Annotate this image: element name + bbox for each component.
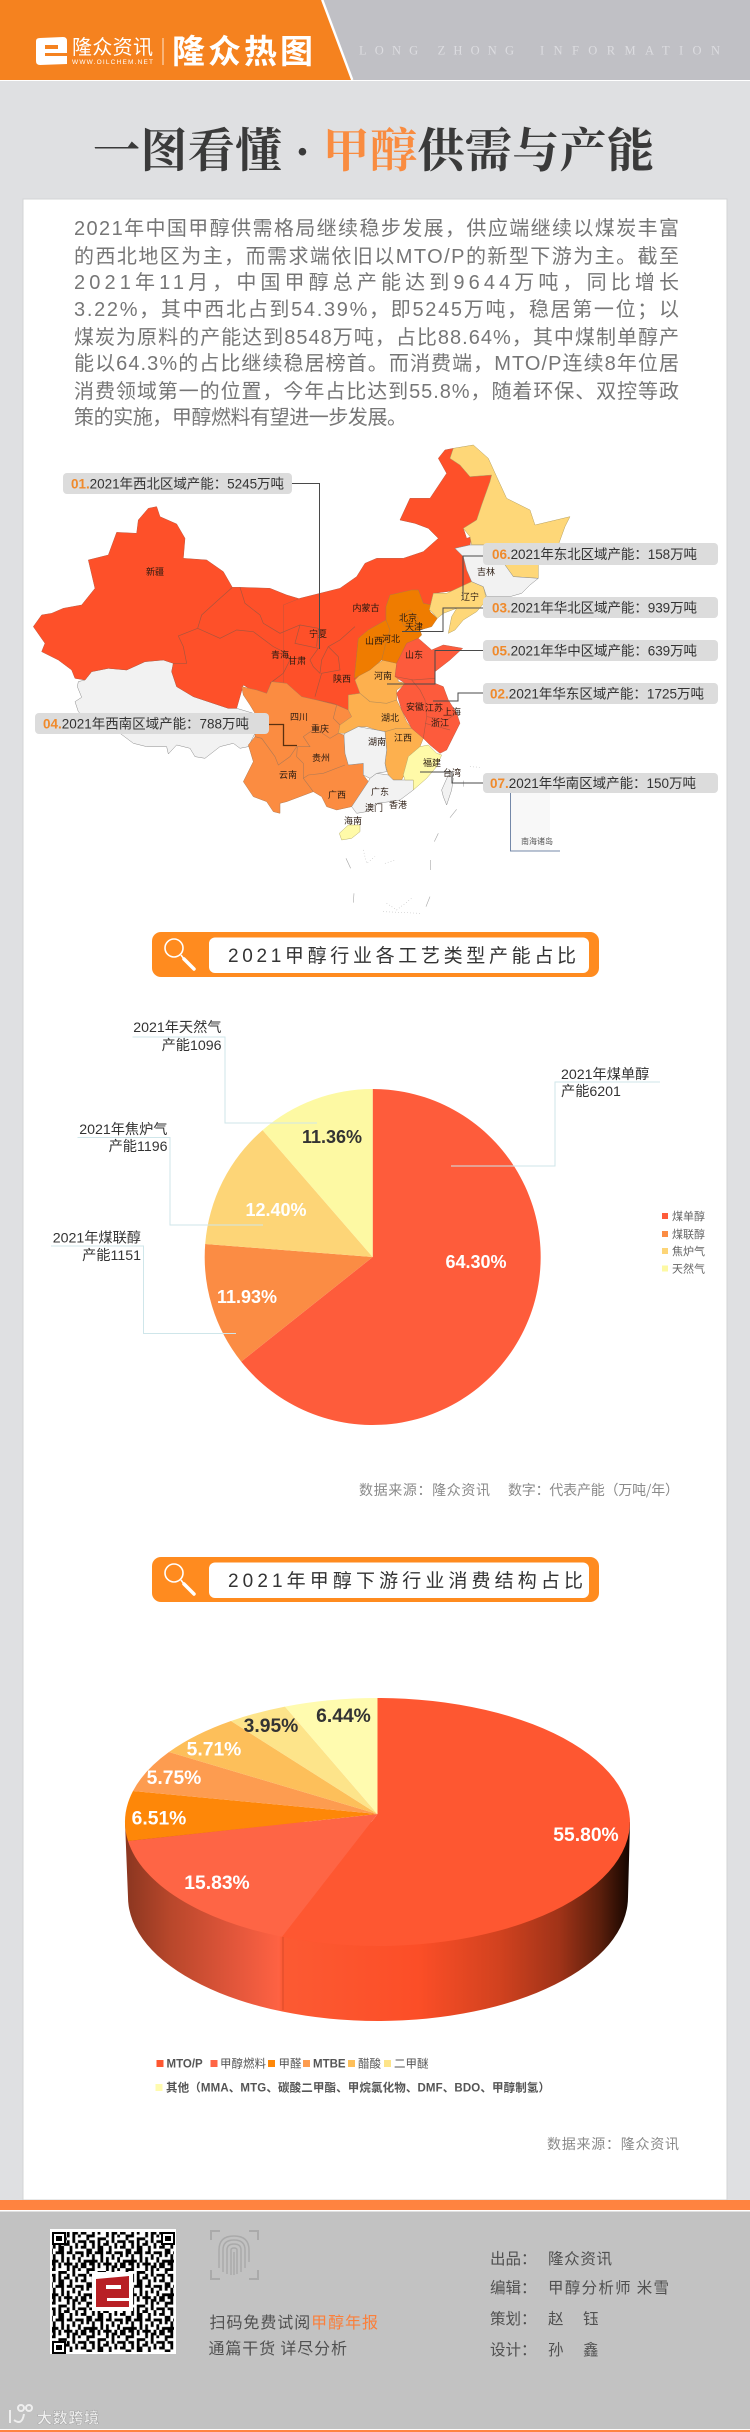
3D pie legend: MTBE — [313, 2058, 346, 2070]
map: province names: 安徽 — [406, 700, 424, 713]
map: province names: 香港 — [389, 798, 407, 811]
source note: downstream chart: 数据来源：隆众资讯 — [547, 2134, 679, 2154]
pie side wall — [125, 1822, 630, 2021]
credits: 策划： — [490, 2307, 537, 2329]
map of China — [33, 445, 718, 913]
slice: others — [285, 1698, 378, 1814]
heading: process type capacity share — [152, 932, 599, 977]
intro text block: 能以64.3%的占比继续稳居榜首。而消费端，MTO/P连续8年位居 — [74, 352, 679, 375]
source note: process chart — [359, 1480, 679, 1500]
map region: northwest, red — [33, 448, 492, 713]
map: south sea islands — [346, 767, 480, 913]
credits — [490, 2247, 669, 2360]
pie value labels — [217, 1127, 507, 1307]
intro text block: 消费领域第一的位置，今年占比达到55.8%，随着环保、双控等政 — [74, 380, 679, 403]
map: province names: 辽宁 — [461, 590, 479, 603]
pie chart: process types — [51, 1019, 705, 1425]
map region: Fujian and Hainan, pale yellow — [339, 745, 442, 840]
slice: MTBE — [133, 1752, 378, 1814]
map: province names: 吉林 — [477, 565, 495, 578]
slice: acetic acid — [169, 1721, 378, 1814]
company website: WWW.OILCHEM.NET — [72, 59, 153, 66]
slice: coal to methanol — [241, 1089, 541, 1425]
map: province names: 台湾 — [443, 766, 461, 779]
credits: 出品： — [490, 2247, 537, 2269]
pie leader lines — [51, 1037, 660, 1334]
3D pie legend: 二甲醚 — [394, 2056, 429, 2070]
slice: formaldehyde — [125, 1791, 378, 1841]
heading: process type capacity share: 2021甲醇行业各工艺类型产能占比 — [228, 945, 576, 967]
callout: northeast capacity — [483, 543, 718, 565]
map: province names: 上海 — [443, 705, 461, 718]
pie value labels: 64.30% — [445, 1252, 507, 1272]
map: province names: 云南 — [279, 768, 297, 781]
slice: methanol fuel — [128, 1814, 378, 1937]
pie callout labels: 2021年煤单醇 — [561, 1066, 649, 1083]
callout: central china capacity: 05.2021年华中区域产能：639万吨 — [492, 644, 697, 658]
map: province names: 山西 — [365, 634, 383, 647]
map: province names: 海南 — [344, 814, 362, 827]
3D pie legend: 甲醇燃料 — [220, 2056, 266, 2070]
map: province names: 河南 — [374, 669, 392, 682]
callout: south china capacity: 07.2021年华南区域产能：150万吨 — [490, 776, 696, 791]
3D pie value labels — [132, 1706, 619, 1894]
3D pie legend: 醋酸 — [358, 2056, 381, 2070]
intro text block: 煤炭为原料的产能达到8548万吨，占比88.64%，其中煤制单醇产 — [74, 326, 679, 349]
heading: downstream consumption share: 2021年甲醇下游行业消费结构占比 — [228, 1570, 583, 1592]
callout: southwest capacity — [35, 713, 269, 734]
english tagline — [359, 44, 720, 58]
map region: Tibet and gray provinces west — [75, 660, 255, 758]
footer — [0, 2200, 750, 2432]
pie value labels: 11.93% — [217, 1287, 277, 1307]
credits: 编辑： — [490, 2276, 537, 2298]
intro text block: 2021年中国甲醇供需格局继续稳步发展，供应端继续以煤炭丰富 — [74, 217, 679, 240]
pie callout labels: 2021年煤联醇 — [53, 1230, 141, 1246]
pie value labels: 11.36% — [302, 1127, 362, 1147]
pie callout labels: 2021年焦炉气 — [79, 1122, 168, 1138]
watermark: 大数跨境 — [37, 2407, 99, 2428]
map: province names: 福建 — [423, 756, 441, 769]
QR caption: 扫码免费试阅甲醇年报 — [210, 2309, 378, 2333]
credits: 孙 — [548, 2338, 564, 2360]
map: province names: 广东 — [371, 785, 389, 798]
source note: process chart: 数字：代表产能（万吨/年） — [508, 1480, 679, 1500]
map borders: east provinces — [395, 677, 457, 738]
credits: 钰 — [583, 2307, 599, 2329]
map: province names: 江苏 — [425, 701, 443, 714]
callout: north china capacity — [483, 597, 718, 618]
3D pie legend: 甲醛 — [278, 2056, 302, 2070]
map: province names: 湖南 — [368, 735, 386, 748]
callout: east china capacity — [483, 683, 718, 704]
pie callout labels: 产能6201 — [561, 1084, 621, 1100]
pie callout labels: 2021年天然气 — [133, 1019, 222, 1036]
3D pie chart: downstream consumption — [125, 1698, 630, 2094]
map region: central, light orange — [338, 660, 423, 780]
callout: northeast capacity: 06.2021年东北区域产能：158万吨 — [492, 547, 697, 562]
heading: downstream consumption share — [152, 1557, 599, 1602]
3D pie value labels: 3.95% — [244, 1716, 298, 1737]
3D pie value labels: 55.80% — [553, 1825, 619, 1846]
callout: northwest capacity — [63, 473, 292, 494]
english tagline: INFORMATION — [540, 44, 720, 58]
english tagline: LONG ZHONG — [359, 44, 514, 58]
pie legend: 煤联醇 — [672, 1226, 705, 1242]
map: province names: 陕西 — [333, 672, 351, 685]
map: province names: 湖北 — [381, 711, 399, 724]
callout: northwest capacity: 01.2021年西北区域产能：5245万吨 — [71, 476, 284, 492]
icon: magnifier — [165, 1564, 194, 1594]
panel: main white card — [23, 199, 727, 2200]
3D pie legend — [156, 2056, 550, 2094]
pie legend — [662, 1208, 705, 1276]
callout: south china capacity — [483, 773, 718, 793]
pie legend: 煤单醇 — [672, 1208, 705, 1224]
map: province names: 宁夏 — [309, 627, 327, 640]
intro text block: 3.22%，其中西北占到54.39%，即5245万吨，稳居第一位；以 — [74, 298, 679, 321]
3D pie value labels: 5.71% — [187, 1740, 241, 1760]
credits: 鑫 — [583, 2338, 599, 2360]
credits: 隆众资讯 — [548, 2247, 612, 2269]
3D pie legend: 其他（MMA、MTG、碳酸二甲酯、甲烷氯化物、DMF、BDO、甲醇制氢） — [166, 2080, 550, 2094]
credits: 甲醇分析师 米雪 — [548, 2276, 669, 2298]
map: province names: 河北 — [382, 632, 400, 645]
map inset: south sea islands box — [510, 793, 560, 851]
map: province names: 北京 — [399, 611, 417, 624]
map: province names: 天津 — [405, 620, 423, 633]
callout: east china capacity: 02.2021年华东区域产能：1725万吨 — [490, 686, 704, 702]
map: province names — [146, 565, 495, 827]
map region: Hunan and Guangdong, gray — [344, 727, 453, 813]
slice: MTO/P — [282, 1698, 630, 1946]
3D pie value labels: 6.44% — [316, 1706, 371, 1727]
header band — [0, 0, 750, 81]
map inset: south sea islands box: 南海诸岛 — [521, 836, 553, 847]
map: province names: 重庆 — [311, 722, 329, 735]
company name: 隆众资讯 — [72, 31, 153, 60]
map leader lines — [269, 484, 483, 783]
QR caption — [208, 2309, 378, 2359]
map: province names: 四川 — [290, 710, 308, 723]
QR code — [50, 2229, 176, 2354]
pie legend: 天然气 — [672, 1260, 705, 1276]
map borders: central provinces — [360, 693, 412, 732]
intro text block: 2021年11月，中国甲醇总产能达到9644万吨，同比增长 — [74, 271, 679, 294]
map: province names: 新疆 — [146, 565, 164, 578]
map: province names: 广西 — [328, 788, 346, 801]
QR caption: 通篇干货 详尽分析 — [208, 2335, 347, 2359]
3D pie value labels: 15.83% — [184, 1873, 250, 1894]
intro text block: 策的实施，甲醇燃料有望进一步发展。 — [74, 406, 407, 429]
map region: southwest, orange — [242, 682, 368, 813]
3D pie value labels: 6.51% — [132, 1808, 186, 1830]
map: province names: 山东 — [405, 648, 423, 661]
pie value labels: 12.40% — [245, 1200, 307, 1220]
icon: magnifier — [165, 939, 194, 969]
brand heading: 隆众热图 — [172, 25, 313, 73]
map region: Jilin, gray — [455, 545, 538, 597]
icon: fingerprint — [211, 2231, 258, 2279]
callout: north china capacity: 03.2021年华北区域产能：939万吨 — [492, 600, 697, 616]
map: province names: 浙江 — [431, 716, 449, 729]
map: province names: 甘肃 — [288, 654, 306, 667]
pie legend: 焦炉气 — [672, 1243, 705, 1259]
callout: southwest capacity: 04.2021年西南区域产能：788万吨 — [43, 716, 249, 732]
map borders: Hebei and Shanxi — [382, 610, 418, 660]
title: 一图看懂 · 甲醇供需与产能 — [93, 126, 654, 178]
pie callout labels: 产能1196 — [109, 1139, 168, 1155]
map: province names: 澳门 — [365, 801, 383, 814]
map region: Hebei and Shanxi, deep orange — [354, 590, 437, 678]
map: province names: 贵州 — [312, 751, 330, 764]
map borders: northwest provinces — [173, 587, 355, 697]
3D pie legend: MTO/P — [166, 2058, 203, 2070]
icon: company logo — [36, 37, 67, 65]
pie callout labels: 产能1096 — [162, 1038, 222, 1054]
slice: dimethyl ether — [231, 1707, 378, 1814]
map: province names: 青海 — [271, 648, 289, 661]
map: province names: 内蒙古 — [352, 601, 380, 614]
credits: 赵 — [548, 2307, 564, 2329]
intro text block: 的西北地区为主，而需求端依旧以MTO/P的新型下游为主。截至 — [74, 245, 679, 268]
watermark — [10, 2405, 99, 2428]
pie callout labels — [53, 1019, 649, 1264]
callout: central china capacity — [483, 640, 718, 661]
slice: coke oven gas — [205, 1130, 373, 1257]
slice: natural gas — [263, 1089, 373, 1257]
map borders: southwest provinces — [255, 705, 345, 792]
map: province names: 江西 — [394, 731, 412, 744]
credits: 设计： — [490, 2338, 537, 2360]
intro text block — [74, 217, 679, 429]
slice: coal co-production — [205, 1244, 373, 1362]
pie callout labels: 产能1151 — [82, 1248, 141, 1264]
map region: northeast, yellow — [429, 445, 570, 633]
source note: process chart: 数据来源：隆众资讯 — [359, 1480, 490, 1500]
3D pie value labels: 5.75% — [147, 1768, 201, 1789]
map region: east, red — [395, 638, 463, 753]
